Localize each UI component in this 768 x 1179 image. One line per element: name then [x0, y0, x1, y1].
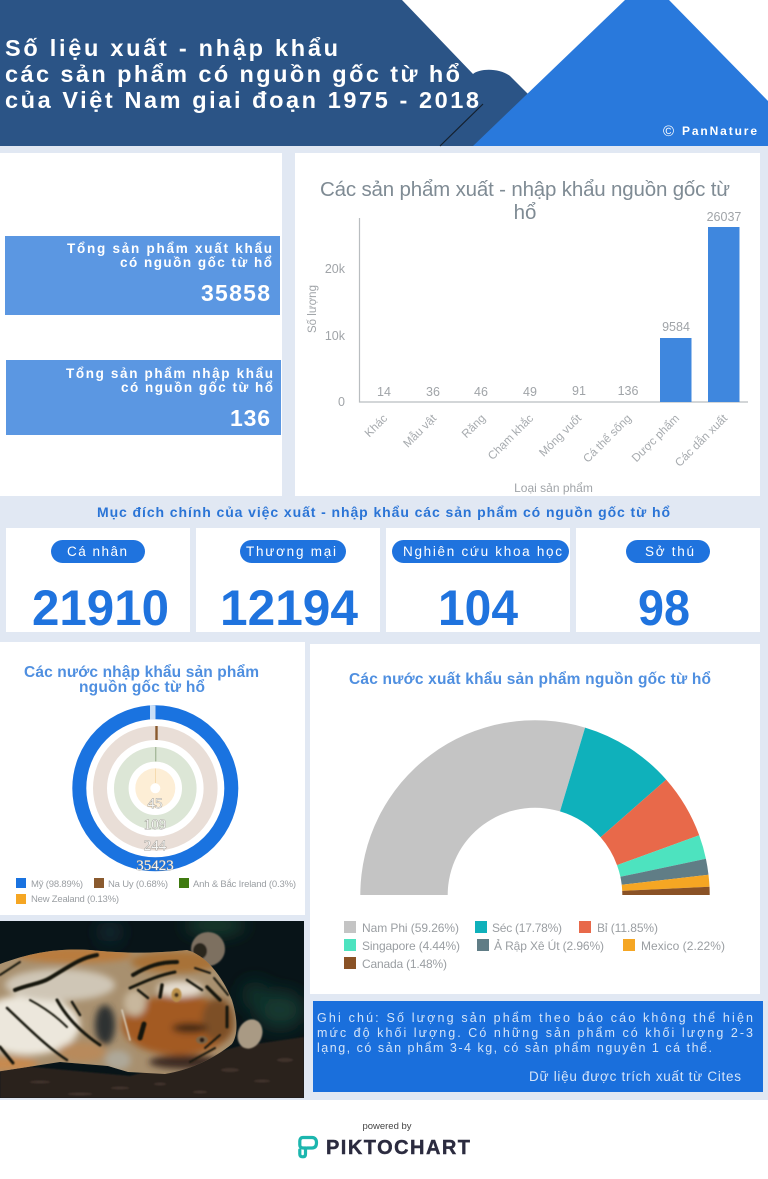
card: personal: [6, 528, 190, 636]
credit: ©: [663, 123, 674, 140]
card: export total: 35858: [201, 280, 270, 306]
radial donut chart: [79, 712, 231, 864]
half donut legend: Bỉ (11.85%): [597, 921, 658, 935]
category labels: Cá thể sống: [581, 412, 634, 465]
half donut legend: Canada (1.48%): [362, 957, 447, 971]
card: import total: 136: [230, 405, 270, 431]
category labels: Chạm khắc: [485, 412, 536, 463]
half donut legend: Nam Phi (59.26%): [362, 921, 459, 935]
stripes: [0, 955, 228, 1063]
y axis labels: 0: [338, 395, 345, 409]
x axis title: Loại sản phẩm: [514, 481, 593, 495]
half donut legend: [344, 921, 725, 971]
category labels: Mẫu vật: [401, 411, 440, 450]
value labels: 91: [572, 384, 586, 398]
title: các sản phẩm có nguồn gốc từ hổ: [5, 61, 460, 87]
panel: totals: [0, 153, 282, 496]
card: personal: Cá nhân: [67, 544, 127, 559]
heading: Các nước nhập khẩu sản phẩm: [24, 664, 259, 681]
title: của Việt Nam giai đoạn 1975 - 2018: [5, 87, 479, 113]
category labels: Khác: [362, 412, 390, 440]
title: [5, 35, 479, 113]
card: research: Nghiên cứu khoa học: [403, 544, 562, 559]
value labels: 9584: [662, 320, 690, 334]
donut values: 45: [148, 796, 162, 812]
y axis labels: 10k: [325, 329, 346, 343]
donut legend: Mỹ (98.89%): [31, 879, 83, 890]
credit: PanNature: [682, 124, 757, 138]
heading: Các nước xuất khẩu sản phẩm nguồn gốc từ hổ: [349, 671, 711, 688]
dark mountain shape: [0, 0, 528, 146]
card: commercial: [196, 528, 380, 636]
axes: [360, 218, 748, 402]
card: import total: Tổng sản phẩm nhập khẩu: [66, 366, 273, 381]
value labels: 14: [377, 385, 391, 399]
card: commercial: 12194: [220, 580, 358, 636]
chart title: hổ: [514, 201, 536, 224]
note text: lạng, có sản phẩm 3-4 kg, có sản phẩm nguyên 1 cá thể.: [317, 1041, 712, 1055]
note text: Ghi chú: Số lượng sản phẩm theo báo cáo không thể hiện: [317, 1011, 753, 1025]
note box: [313, 1001, 763, 1092]
donut values: 109: [144, 817, 166, 833]
footer: powered by Piktochart: powered by: [362, 1121, 412, 1132]
card: export total: có nguồn gốc từ hổ: [120, 255, 272, 270]
tiger ears: [191, 932, 267, 1052]
logo icon: [300, 1138, 316, 1157]
panel: bar chart: [295, 153, 760, 496]
category labels: Các dẫn xuất: [673, 411, 731, 469]
panel: exporting countries: [310, 644, 760, 994]
y axis title: Số lượng: [307, 285, 319, 333]
y axis labels: 20k: [325, 262, 346, 276]
donut legend: [16, 878, 296, 905]
tiger eyes: [172, 988, 208, 1044]
donut values: 244: [144, 838, 167, 854]
category labels: Móng vuốt: [537, 411, 585, 459]
card: zoo: 98: [638, 580, 690, 636]
card: import total: có nguồn gốc từ hổ: [121, 380, 273, 395]
half donut chart: [360, 720, 710, 895]
logo wordmark: PIKTOCHART: [326, 1137, 470, 1159]
donut values: [136, 796, 174, 874]
card: export total: [5, 236, 280, 315]
value labels: [377, 210, 741, 399]
donut values: 35423: [136, 858, 174, 874]
half donut legend: Mexico (2.22%): [641, 939, 725, 953]
category labels: Răng: [459, 412, 488, 441]
value labels: 136: [618, 384, 638, 398]
half donut legend: Singapore (4.44%): [362, 939, 460, 953]
value labels: 46: [474, 385, 488, 399]
footer: powered by Piktochart: [300, 1121, 470, 1159]
half donut legend: Ả Rập Xê Út (2.96%): [494, 938, 604, 953]
donut legend: New Zealand (0.13%): [31, 894, 119, 905]
category labels: Dược phẩm: [629, 412, 682, 465]
card: research: 104: [438, 580, 518, 636]
card: research: [386, 528, 570, 636]
value labels: 36: [426, 385, 440, 399]
credit: [663, 123, 757, 140]
card: zoo: Sở thú: [645, 544, 694, 559]
card: zoo: [576, 528, 760, 636]
source line: Dữ liệu được trích xuất từ Cites: [529, 1069, 741, 1084]
note text: [317, 1011, 753, 1055]
note text: mức độ khối lượng. Có những sản phẩm có khối lượng 2-3: [317, 1026, 753, 1040]
donut legend: Anh & Bắc Ireland (0.3%): [193, 879, 296, 890]
card: export total: Tổng sản phẩm xuất khẩu: [67, 241, 272, 256]
dark diagonal line: [440, 104, 483, 146]
chart title: [320, 178, 730, 224]
photo: tiger: [0, 917, 304, 1098]
card: personal: 21910: [32, 580, 169, 636]
header banner: [0, 0, 768, 146]
bars: [660, 227, 740, 402]
heading: nguồn gốc từ hổ: [79, 679, 205, 696]
value labels: 49: [523, 385, 537, 399]
tiger fur masses: [0, 950, 236, 1074]
bright blue mountain: [473, 0, 768, 146]
card: commercial: Thương mại: [246, 544, 336, 559]
chart title: Các sản phẩm xuất - nhập khẩu nguồn gốc từ: [320, 178, 730, 201]
half donut legend: Séc (17.78%): [492, 921, 562, 935]
heading: [24, 664, 259, 696]
y axis labels: [325, 262, 346, 409]
card: import total: [6, 360, 281, 435]
title: Số liệu xuất - nhập khẩu: [5, 35, 338, 61]
category labels: [362, 411, 731, 469]
donut legend: Na Uy (0.68%): [108, 879, 168, 890]
section heading: purposes: Mục đích chính của việc xuất - nhập khẩu các sản phẩm có nguồn gốc từ hổ: [97, 504, 670, 520]
panel: importing countries: [0, 642, 305, 915]
value labels: 26037: [707, 210, 741, 224]
ground: [0, 1037, 304, 1098]
